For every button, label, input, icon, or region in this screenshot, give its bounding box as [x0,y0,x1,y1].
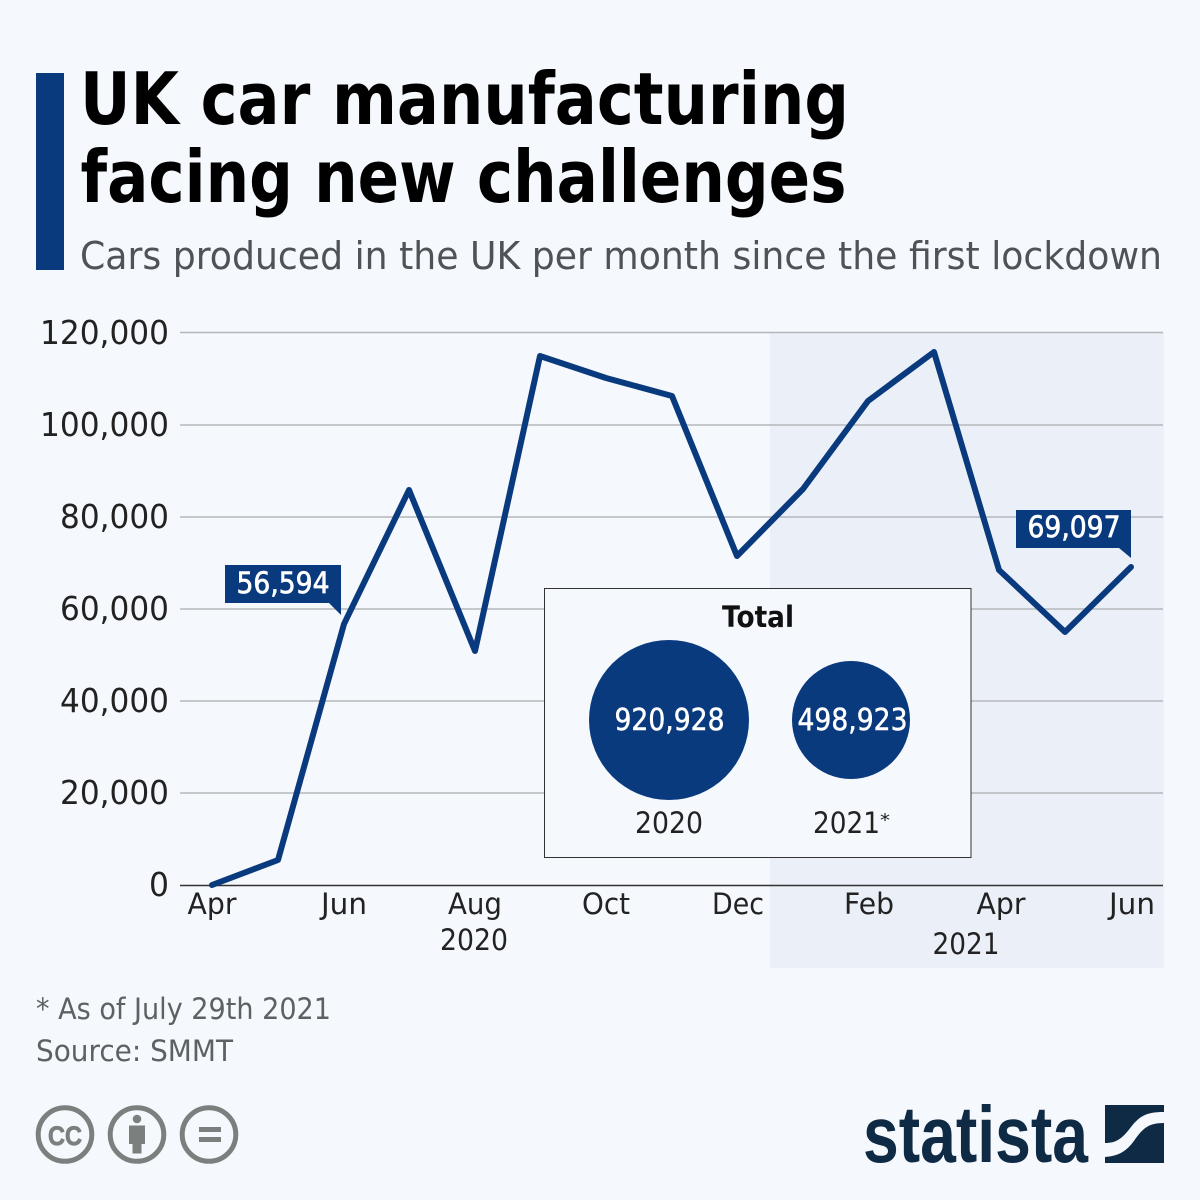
circle: 2021: 498,923 [798,703,908,738]
label: 2021: * [880,810,890,831]
title: facing new challenges [80,135,846,219]
icon: creative commons: CC [48,1121,82,1151]
circle: 2021 [792,661,910,779]
statista logo: statista [863,1090,1088,1179]
label: 2021: 2021 [813,806,880,840]
x axis labels: Jun [1107,887,1155,921]
callout: June 2021 [1016,510,1131,558]
label: 2020: 2020 [635,806,703,840]
title [80,57,849,219]
callout: June 2021: 69,097 [1028,510,1120,544]
icon: no derivatives [182,1108,236,1161]
icon: statista mark [1105,1105,1164,1163]
shaded band: 2021 [770,332,1164,968]
circle: 2020: 920,928 [614,703,724,738]
icon: attribution [110,1108,164,1161]
y axis labels: 60,000 [60,589,169,628]
x axis labels: Apr [976,887,1026,921]
source: Source: SMMT [36,1034,233,1068]
x axis labels: Feb [844,887,894,921]
callout: June 2020 [225,565,341,615]
y axis labels: 120,000 [40,313,169,352]
y axis labels [40,313,169,904]
circle: 2020 [589,640,749,800]
x axis labels: Oct [582,887,630,921]
x axis labels: Apr [188,887,237,921]
x axis labels: Aug [448,887,502,921]
y axis labels: 20,000 [60,773,169,812]
callout: June 2020: 56,594 [236,566,330,600]
x axis labels [188,887,1155,961]
x axis labels: 2020 [440,923,508,957]
panel: total [544,588,971,858]
y axis labels: 80,000 [60,497,169,536]
x axis labels: Jun [319,887,367,921]
line chart [40,313,1163,961]
y axis labels: 40,000 [60,681,169,720]
x axis labels: 2021 [932,927,1000,961]
x axis labels: Dec [712,887,764,921]
title: UK car manufacturing [80,57,849,141]
panel heading: Total [722,600,794,634]
subtitle: Cars produced in the UK per month since the first lockdown [80,234,1162,278]
y axis labels: 0 [149,865,169,904]
title accent bar [36,73,64,270]
y axis labels: 100,000 [40,405,169,444]
icon: creative commons [38,1108,92,1161]
data line [212,352,1131,885]
footnote: * As of July 29th 2021 [36,992,331,1026]
